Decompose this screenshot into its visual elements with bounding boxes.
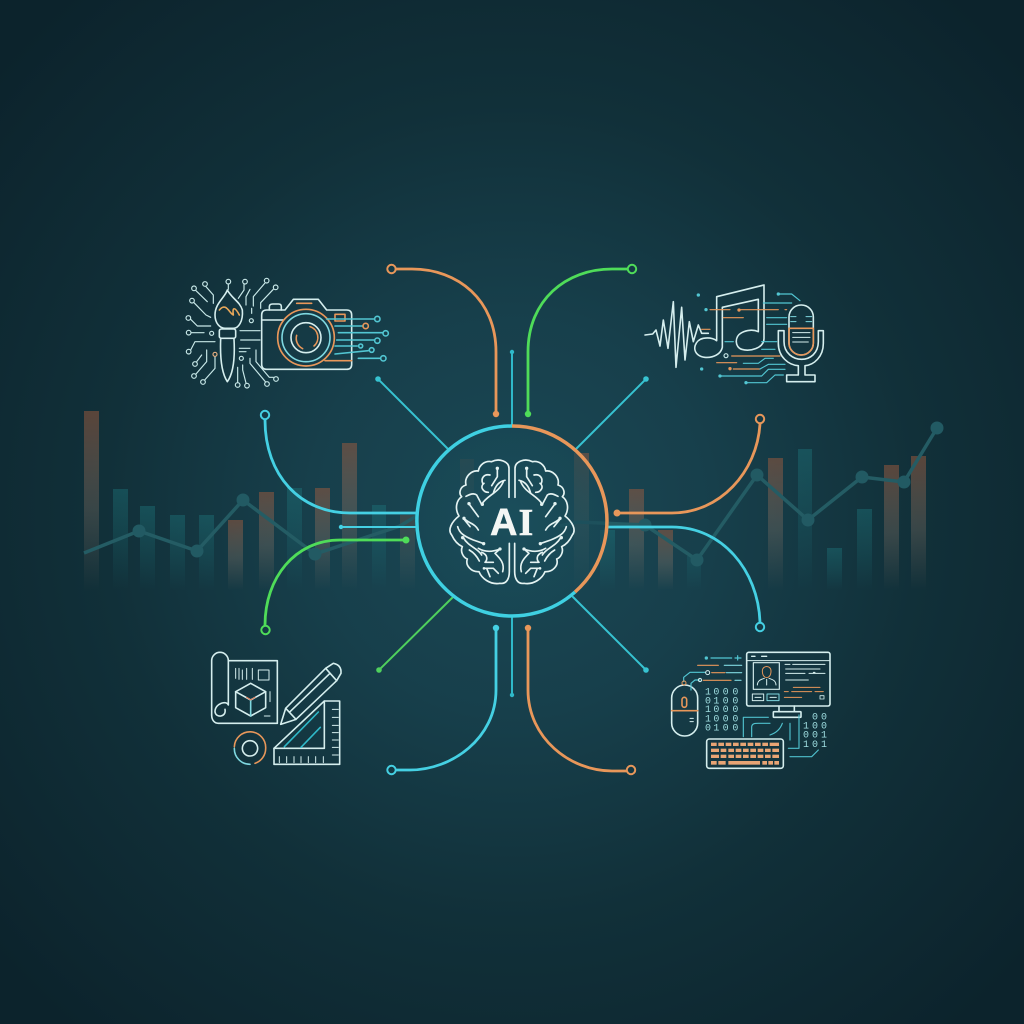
binary digits: 0 <box>723 687 729 698</box>
connector: left middle stem <box>339 525 417 529</box>
set square ruler <box>274 701 340 764</box>
connector: diagonal upper left <box>375 376 448 449</box>
binary digits: 1 <box>821 739 827 750</box>
connectors: curved and straight links around the hub <box>261 265 764 774</box>
connector: top centre stem <box>510 350 514 425</box>
line chart: right background <box>560 422 944 566</box>
keyboard <box>707 739 783 768</box>
bar chart: left background <box>84 411 415 591</box>
connector: bottom left cyan <box>387 625 499 774</box>
binary digits: 0 <box>732 695 738 706</box>
code trails <box>698 656 818 757</box>
binary digits: 0 <box>812 711 818 722</box>
hub disc <box>417 426 607 616</box>
binary digits: 0 <box>732 687 738 698</box>
icon: computer, mouse and keyboard (code generation) <box>672 652 830 768</box>
hub ring: orange arc <box>512 426 607 592</box>
label: AI: AI <box>490 502 533 544</box>
icon: brain <box>450 460 574 584</box>
connector: right upper orange <box>614 415 764 516</box>
brush circuit traces <box>186 278 278 388</box>
connector: top left orange <box>387 265 499 417</box>
connector: diagonal lower left green <box>376 597 453 673</box>
binary digits: 0 <box>723 695 729 706</box>
binary digits: 0 <box>812 739 818 750</box>
blueprint scroll <box>212 652 277 723</box>
binary digits: 0 <box>723 723 729 734</box>
mouse <box>672 671 710 736</box>
binary digits: 1 <box>713 695 719 706</box>
central AI hub <box>417 426 607 616</box>
waveform <box>645 302 708 367</box>
music notes <box>695 285 764 357</box>
brain: left hemisphere <box>450 460 509 584</box>
isometric cube <box>236 683 266 716</box>
audio data traces <box>697 292 800 384</box>
camera data lines <box>327 316 388 361</box>
connector: bottom centre stem <box>510 618 514 697</box>
binary digits: 0 <box>713 704 719 715</box>
binary digits: 0 <box>723 713 729 724</box>
binary digits: 0 <box>713 687 719 698</box>
binary digits: 0 <box>713 713 719 724</box>
pencil <box>281 663 341 724</box>
connector: bottom right orange <box>525 625 635 774</box>
binary digits: 1 <box>705 704 711 715</box>
binary digits: 0 <box>705 695 711 706</box>
binary digits: 1 <box>713 723 719 734</box>
icon: blueprint, pencil and ruler (design generation) <box>212 652 341 764</box>
binary digits: 0 <box>732 723 738 734</box>
binary digits: 1 <box>803 721 809 732</box>
bar chart: right background <box>460 449 926 590</box>
connector: top right green <box>525 265 636 417</box>
binary digits: 0 <box>732 713 738 724</box>
monitor <box>747 652 830 717</box>
paintbrush <box>215 290 242 382</box>
binary digits: 0 <box>821 721 827 732</box>
connector: diagonal lower right <box>573 597 649 673</box>
binary digits: 1 <box>705 687 711 698</box>
brain: right hemisphere <box>515 460 574 584</box>
camera lens <box>278 309 334 366</box>
binary digits <box>705 687 827 750</box>
icon: brush and camera (image generation) <box>186 278 388 388</box>
connector: diagonal upper right <box>576 376 649 449</box>
icon: music, waveform and microphone (audio generation) <box>645 285 823 384</box>
binary digits: 0 <box>812 730 818 741</box>
microphone <box>778 305 823 382</box>
binary digits: 1 <box>821 730 827 741</box>
binary digits: 0 <box>812 721 818 732</box>
binary digits: 1 <box>803 739 809 750</box>
hub ring: cyan arc <box>417 426 575 616</box>
circular dial <box>234 732 266 764</box>
connector: right lower cyan <box>607 527 764 631</box>
line chart: left background <box>84 494 418 560</box>
binary digits: 0 <box>723 704 729 715</box>
binary digits: 1 <box>705 713 711 724</box>
binary digits: 0 <box>732 704 738 715</box>
connector: left lower green <box>261 536 410 634</box>
binary digits: 0 <box>821 711 827 722</box>
binary digits: 0 <box>803 730 809 741</box>
binary digits: 0 <box>705 723 711 734</box>
connector: left upper cyan <box>261 411 417 513</box>
camera body <box>262 299 352 369</box>
